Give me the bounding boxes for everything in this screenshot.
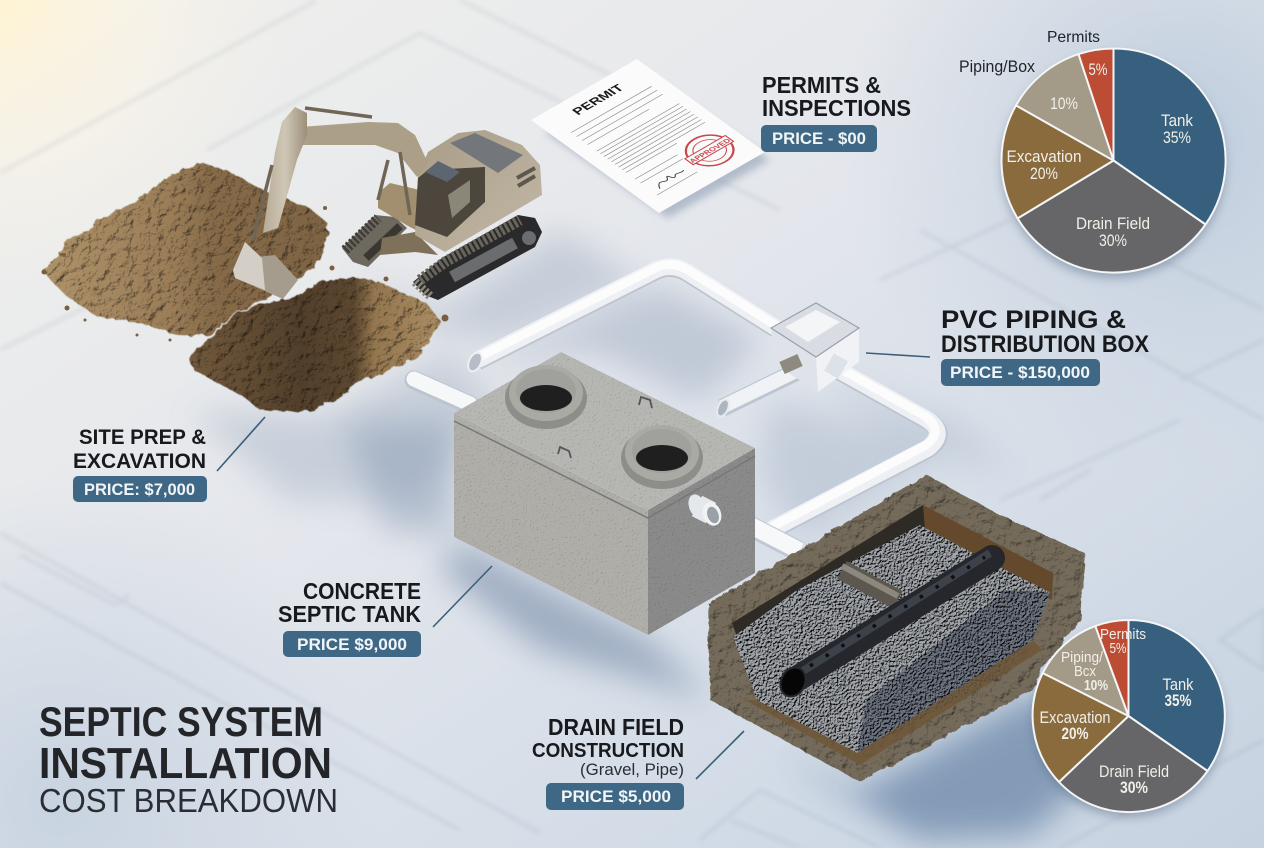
callout: concrete septic tank: CONCRETE <box>303 578 421 604</box>
callout: permits and inspections: PERMITS & <box>762 72 881 98</box>
drain field outer soil <box>708 475 1085 782</box>
pie chart: lower cost share: Bcx <box>1074 663 1096 680</box>
excavator cabin <box>415 161 485 237</box>
illustration: drain field <box>708 475 1085 782</box>
slice: drain field <box>1059 716 1208 812</box>
ground shadows <box>190 230 1100 840</box>
pie chart: lower cost share <box>1032 620 1225 817</box>
callout: PVC piping and distribution box: DISTRIBUTION BOX <box>941 331 1149 358</box>
excavator hydraulics <box>253 108 410 240</box>
callout: PVC piping and distribution box: PVC PIPING & <box>941 306 1126 334</box>
title: SEPTIC SYSTEM <box>39 698 323 745</box>
illustration: tank inlet stub <box>414 379 470 405</box>
pie chart: lower cost share: Permits <box>1100 626 1146 643</box>
callout: site prep and excavation: PRICE: $7,000 <box>84 480 195 499</box>
excavator house <box>415 130 542 252</box>
tank right face <box>648 448 755 635</box>
excavator stick <box>263 107 307 233</box>
pie chart: lower cost share: 35% <box>1164 691 1192 710</box>
callout: permits and inspections <box>761 72 911 152</box>
excavator undercarriage <box>380 232 438 255</box>
slice: drain field <box>1018 160 1206 273</box>
callout: permits and inspections: INSPECTIONS <box>762 95 911 121</box>
callout: site prep and excavation: SITE PREP & <box>79 426 206 449</box>
slice: piping <box>1043 626 1128 716</box>
slice: excavation <box>1033 673 1128 782</box>
permit stamp: APPROVED <box>687 137 733 164</box>
callout: concrete septic tank: PRICE $9,000 <box>297 635 407 654</box>
permit stamp <box>674 128 745 173</box>
excavator rear track <box>342 215 407 267</box>
pie chart: lower cost share: 30% <box>1120 778 1148 797</box>
slice: piping <box>1016 54 1114 160</box>
callout: permits and inspections: PRICE - $00 <box>772 129 866 148</box>
pie chart: lower cost share: Excavation <box>1040 708 1110 727</box>
drain field perforated pipe <box>776 553 992 701</box>
excavator bucket <box>233 242 298 299</box>
illustration: excavated pit <box>188 277 440 412</box>
drain field soil lip <box>745 640 1042 765</box>
title: COST BREAKDOWN <box>39 782 338 819</box>
excavator vents <box>517 168 535 186</box>
pie chart: upper cost share: Permits <box>1047 29 1100 46</box>
slice: tank <box>1128 620 1225 771</box>
slice: excavation <box>1001 105 1114 218</box>
illustration: distribution box stub <box>715 371 796 418</box>
illustration: distribution box <box>771 303 859 392</box>
permit title: PERMIT <box>569 82 627 117</box>
pie chart: upper cost share: Excavation <box>1006 147 1082 166</box>
pie chart: lower cost share: 5% <box>1110 640 1126 657</box>
drain field gravel bed <box>733 525 1050 753</box>
illustration: excavator <box>233 107 542 300</box>
callout: drain field construction <box>532 714 744 810</box>
pie chart: lower cost share: Drain Field <box>1099 762 1169 781</box>
callout: PVC piping and distribution box: PRICE - $150,000 <box>950 363 1090 382</box>
drain field gravel shaded face <box>857 590 1050 753</box>
pie chart: upper cost share: Piping/Box <box>959 57 1035 76</box>
tank outlet pipe <box>685 492 725 528</box>
callout: drain field construction: CONSTRUCTION <box>532 740 684 762</box>
pie chart: upper cost share: Drain Field <box>1076 214 1150 233</box>
pie chart: upper cost share: 5% <box>1088 60 1108 79</box>
callout: site prep and excavation: EXCAVATION <box>73 450 206 473</box>
callout: PVC piping and distribution box <box>866 306 1149 386</box>
callout: concrete septic tank <box>278 566 492 657</box>
tank top face <box>454 352 755 510</box>
tank opening two <box>621 425 703 489</box>
illustration: concrete septic tank <box>454 352 755 635</box>
tank opening one <box>505 365 587 429</box>
illustration: permit document <box>531 59 770 218</box>
pie chart: lower cost share: 10% <box>1084 677 1108 694</box>
pie chart: upper cost share: 10% <box>1050 94 1078 113</box>
excavator boom <box>300 122 428 177</box>
callout: drain field construction: (Gravel, Pipe) <box>580 760 684 779</box>
drain field cross pipe <box>842 566 898 600</box>
permit signature <box>654 168 687 189</box>
pie chart: lower cost share: Piping/ <box>1061 649 1104 666</box>
callout: site prep and excavation <box>73 417 265 502</box>
pie chart: upper cost share <box>959 29 1226 278</box>
excavator engine block <box>378 183 420 232</box>
slice: tank <box>1114 48 1226 224</box>
pie chart: lower cost share: 20% <box>1062 724 1088 743</box>
callout: drain field construction: PRICE $5,000 <box>561 787 671 806</box>
callout: drain field construction: DRAIN FIELD <box>548 714 684 740</box>
pie chart: upper cost share: 35% <box>1163 128 1191 147</box>
pie chart: upper cost share: 30% <box>1099 231 1127 250</box>
pie chart: lower cost share: Tank <box>1162 675 1194 694</box>
title: INSTALLATION <box>39 739 332 788</box>
drain field back wall <box>732 505 930 645</box>
slice: permits <box>1095 620 1128 716</box>
tank left face <box>454 413 648 635</box>
excavator front track <box>413 215 542 300</box>
illustration: upper PVC pipe <box>465 264 780 374</box>
tank lifting handles <box>558 397 652 458</box>
callout: concrete septic tank: SEPTIC TANK <box>278 601 421 627</box>
slice: permits <box>1078 48 1114 160</box>
illustration: lower PVC pipe <box>742 360 938 552</box>
illustration: soil mound <box>42 162 448 342</box>
pie chart: upper cost share: 20% <box>1030 164 1058 183</box>
excavator roof panel <box>450 133 523 173</box>
pie chart: upper cost share: Tank <box>1161 111 1193 130</box>
title <box>39 698 338 819</box>
drain field side wall <box>923 505 1053 600</box>
